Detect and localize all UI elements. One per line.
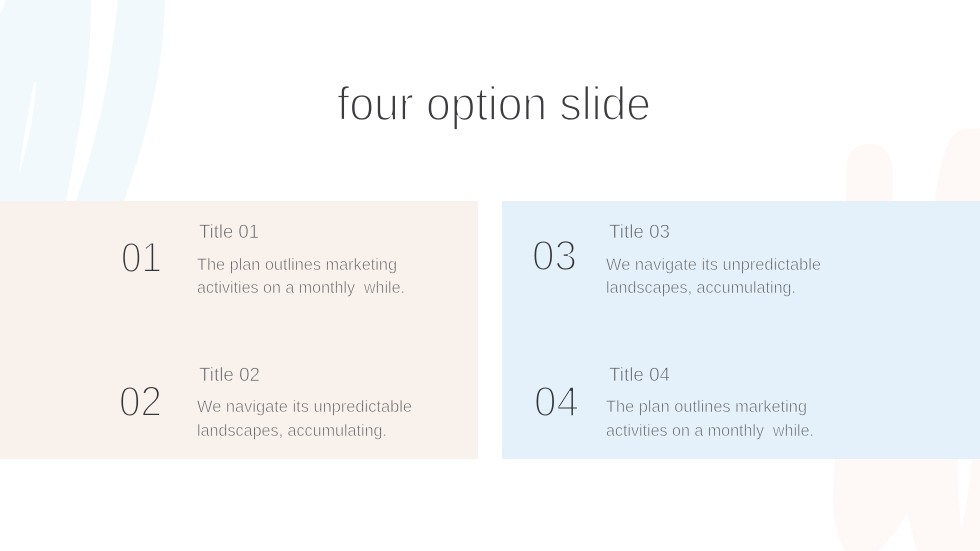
heading: Title 02: Title 02 xyxy=(199,365,260,386)
number 04: 04 xyxy=(534,378,579,426)
number 01: 01 xyxy=(121,234,162,282)
description 04: The plan outlines marketing xyxy=(606,397,807,416)
number 03: 03 xyxy=(532,232,577,280)
description 02: landscapes, accumulating. xyxy=(197,421,387,440)
description 03 xyxy=(606,255,821,297)
heading: Title 01: Title 01 xyxy=(199,222,259,243)
number 02: 02 xyxy=(119,378,162,426)
panel: options 01 and 02 xyxy=(0,201,478,459)
description 01: activities on a monthly while. xyxy=(197,278,405,297)
description 01 xyxy=(197,255,405,297)
decoration: blue brush strokes top left xyxy=(0,0,165,201)
panel: options 03 and 04 xyxy=(502,201,980,459)
heading: Title 03: Title 03 xyxy=(609,222,670,243)
description 04 xyxy=(606,397,814,440)
description 02 xyxy=(197,397,412,440)
option 01 xyxy=(121,222,405,297)
description 03: landscapes, accumulating. xyxy=(606,278,796,297)
heading: Title 04: Title 04 xyxy=(609,365,670,386)
title: four option slide xyxy=(337,77,651,130)
option 02 xyxy=(119,365,412,440)
description 01: The plan outlines marketing xyxy=(197,255,397,274)
description 04: activities on a monthly while. xyxy=(606,421,814,440)
description 02: We navigate its unpredictable xyxy=(197,397,412,416)
decoration: peach brush strokes right xyxy=(833,128,980,551)
option 04 xyxy=(534,365,814,440)
option 03 xyxy=(532,222,821,297)
description 03: We navigate its unpredictable xyxy=(606,255,821,274)
